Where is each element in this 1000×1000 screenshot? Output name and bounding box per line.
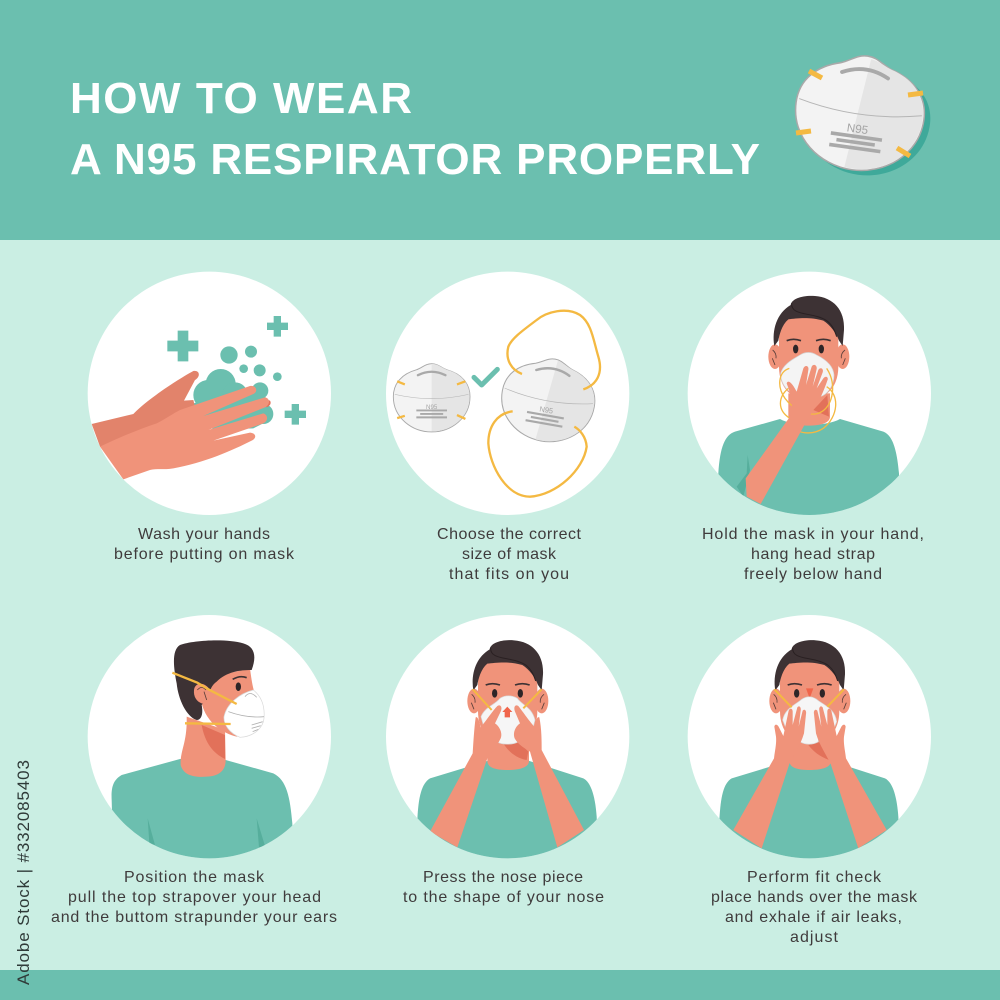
eye and brow (233, 677, 247, 679)
shirt (719, 761, 900, 863)
head (769, 640, 850, 770)
straps (473, 689, 542, 710)
worn mask (783, 697, 837, 744)
caption: step 4: pull the top strapover your head (68, 889, 321, 906)
shirt fold (737, 455, 750, 497)
caption: step 6: place hands over the mask (711, 889, 918, 906)
face (202, 668, 255, 737)
panel: perform fit check (688, 615, 931, 863)
neck shadow (813, 395, 829, 417)
neck (181, 717, 226, 777)
caption: step 2: Choose the correct (437, 526, 582, 543)
icon: large mask (495, 351, 601, 449)
panel: press nose piece (386, 615, 629, 863)
side mask (224, 690, 264, 737)
bottom band (0, 970, 1000, 1000)
head straps (172, 673, 237, 724)
caption: step 5: Press the nose piece (423, 869, 583, 886)
caption: step 4: and the buttom strapunder your ears (51, 909, 337, 926)
straps (774, 689, 844, 707)
icon: back hand (92, 370, 199, 447)
icon: N95 respirator in header: N95 (846, 121, 869, 137)
panel: position the mask (88, 615, 331, 863)
icon: plus signs (167, 316, 306, 425)
hair (174, 640, 254, 720)
caption: step 1 (114, 526, 295, 563)
title: A N95 RESPIRATOR PROPERLY (70, 135, 760, 184)
caption: step 2 (437, 526, 582, 583)
right arm and hand (814, 706, 887, 848)
worn mask with arrow (481, 696, 535, 744)
neck shadow (503, 742, 528, 760)
caption: step 3: freely below hand (744, 566, 882, 583)
neck shadow (808, 742, 829, 760)
icon: check mark (474, 369, 497, 385)
icon: soap bubbles (193, 346, 282, 430)
title: HOW TO WEAR (70, 74, 412, 123)
caption: step 3 (702, 526, 924, 583)
left arm and hand (733, 706, 806, 848)
caption: step 4 (51, 869, 337, 926)
icon: front hand (100, 386, 269, 479)
icon: small mask (393, 364, 470, 432)
caption: step 6: Perform fit check (747, 869, 882, 886)
icon: N95 respirator in header (788, 47, 938, 184)
stock credit: Adobe Stock | #332085403 (14, 760, 33, 985)
head (768, 296, 849, 426)
neck shadow (202, 725, 225, 759)
arm and hand (746, 365, 828, 504)
right arm and hand (514, 705, 584, 847)
icon: small mask: N95 (426, 404, 438, 411)
caption: step 3: hang head strap (751, 546, 875, 563)
caption: step 2: that fits on you (449, 566, 569, 583)
panel: choose mask size (386, 272, 629, 515)
nose arrow (806, 688, 814, 696)
shirt (718, 419, 900, 523)
caption: step 6: and exhale if air leaks, (725, 909, 902, 926)
icon: mask straps (488, 311, 600, 497)
ear (194, 684, 210, 704)
caption: step 1: before putting on mask (114, 546, 295, 563)
title (70, 74, 760, 184)
shirt (417, 761, 598, 863)
caption: step 6: adjust (790, 929, 839, 946)
panel: hold mask in hand (688, 272, 931, 523)
worn mask (781, 352, 834, 397)
caption: step 4: Position the mask (124, 869, 265, 886)
header band (0, 0, 1000, 240)
shirt (112, 759, 293, 863)
caption: step 3: Hold the mask in your hand, (702, 526, 924, 543)
caption: step 5 (403, 869, 604, 906)
panel: wash hands (88, 272, 331, 515)
caption: step 1: Wash your hands (138, 526, 270, 543)
caption: step 2: size of mask (462, 546, 557, 563)
head (467, 640, 548, 770)
icon: large mask: N95 (539, 404, 554, 416)
caption: step 6 (711, 869, 918, 946)
left arm and hand (430, 705, 501, 847)
hanging straps (780, 368, 836, 433)
caption: step 5: to the shape of your nose (403, 889, 604, 906)
icon: back hand finger tips (266, 400, 271, 408)
shirt folds (148, 818, 265, 847)
